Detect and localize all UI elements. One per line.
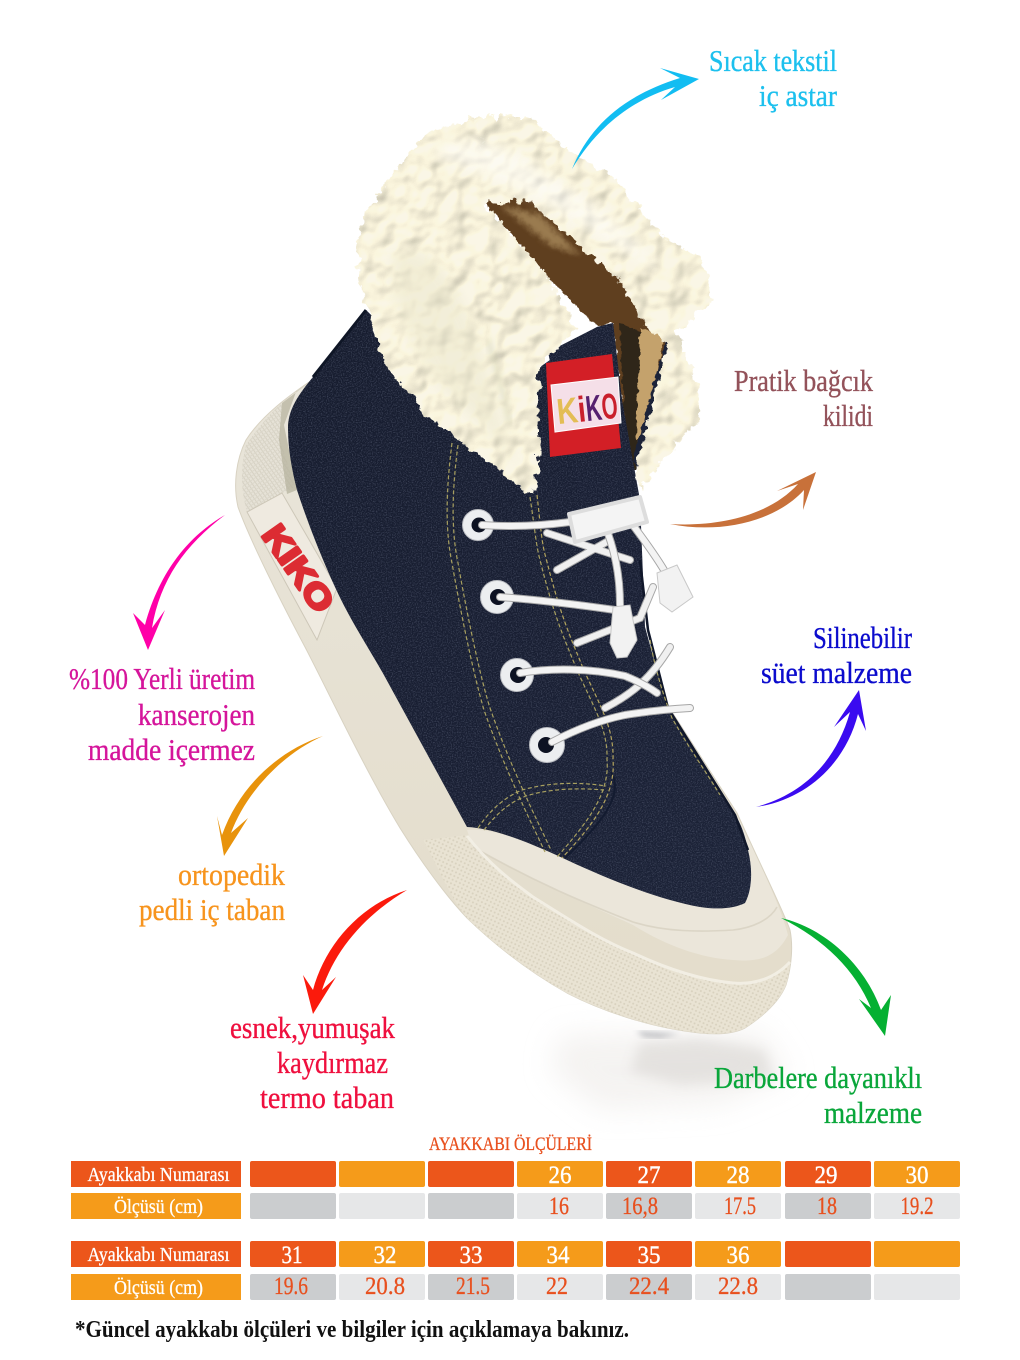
table row: measurements 31-36: 22.8 — [718, 1273, 758, 1300]
cord lock — [569, 497, 647, 542]
callout: Pratik bağcık kilidi — [734, 364, 874, 433]
callout: Darbelere dayanıklı malzeme — [714, 1061, 922, 1130]
navy suede upper — [288, 310, 751, 908]
callout: Silinebilir süet malzeme — [761, 621, 912, 690]
table row: shoe numbers 31-36 — [71, 1241, 960, 1269]
fur collar back — [440, 117, 713, 490]
callout: %100 Yerli üretim — [69, 662, 255, 767]
tag: KIKO woven label: K — [584, 387, 604, 429]
brand plate: KIKO: KIKO — [255, 518, 342, 619]
outsole — [236, 380, 792, 1034]
eyelets — [462, 510, 564, 762]
table row: shoe numbers 31-36: 32 — [374, 1242, 396, 1269]
tongue — [548, 323, 628, 510]
stitching — [447, 443, 720, 858]
inner lining — [482, 196, 676, 470]
callout: esnek yumuşak kaydırmaz termo taban: esnek,yumuşak — [230, 1011, 396, 1045]
callout: esnek yumuşak kaydırmaz termo taban: kaydırmaz — [277, 1046, 388, 1080]
table row: measurements 26-30: 16 — [549, 1193, 569, 1220]
table row: shoe numbers 26-30 — [71, 1161, 960, 1189]
callout: ortopedik pedli iç taban: ortopedik — [178, 858, 286, 892]
tag: KIKO woven label: i — [576, 388, 588, 430]
size table heading: AYAKKABI ÖLÇÜLERİ — [429, 1134, 592, 1155]
table row: measurements 31-36: 21.5 — [456, 1273, 490, 1300]
callout: Pratik bağcık kilidi: kilidi — [823, 399, 873, 433]
table row: measurements 31-36: 22.4 — [629, 1273, 669, 1300]
brand plate: KIKO — [247, 493, 342, 640]
table row: measurements 31-36: 20.8 — [365, 1273, 405, 1300]
arrow: magenta — [133, 515, 225, 650]
tag: KIKO woven label: O — [599, 385, 620, 427]
arrow: red — [303, 890, 407, 1014]
fur collar front flap — [357, 120, 660, 493]
table row: measurements 26-30: 16,8 — [622, 1193, 658, 1220]
table row: shoe numbers 31-36: 35 — [638, 1242, 660, 1269]
table row: measurements 26-30: 19.2 — [900, 1193, 934, 1220]
callout: Sıcak tekstil iç astar: iç astar — [759, 79, 837, 113]
table row: shoe numbers 31-36: 31 — [282, 1242, 302, 1269]
laces over — [482, 517, 690, 742]
table row: shoe numbers 31-36: 33 — [460, 1242, 482, 1269]
callout: Silinebilir süet malzeme: Silinebilir — [813, 621, 912, 655]
arrow: orange — [217, 736, 323, 856]
table row: shoe numbers 26-30: 26 — [548, 1162, 572, 1189]
tag: KIKO woven label: K — [555, 389, 580, 432]
callout: esnek yumuşak kaydırmaz termo taban: termo taban — [260, 1081, 394, 1115]
table row: shoe numbers 26-30: 27 — [638, 1162, 660, 1189]
table row: measurements 26-30: Ölçüsü (cm) — [114, 1195, 203, 1218]
callout: Darbelere dayanıklı malzeme: Darbelere dayanıklı — [714, 1061, 922, 1095]
arrow: brown — [670, 472, 816, 527]
table row: measurements 31-36: Ölçüsü (cm) — [114, 1276, 203, 1299]
table row: measurements 26-30: 18 — [817, 1193, 837, 1220]
table row: shoe numbers 26-30: 30 — [906, 1162, 928, 1189]
table row: shoe numbers 31-36: 36 — [726, 1242, 750, 1269]
callout: ortopedik pedli iç taban: pedli iç taban — [139, 893, 285, 927]
table row: shoe numbers 26-30: 29 — [814, 1162, 838, 1189]
table row: shoe numbers 31-36: 34 — [546, 1242, 570, 1269]
arrow: blue — [756, 690, 866, 807]
callout: Darbelere dayanıklı malzeme: malzeme — [824, 1096, 922, 1130]
callout: Pratik bağcık kilidi: Pratik bağcık — [734, 364, 874, 398]
laces under — [547, 533, 670, 708]
arrow: cyan — [572, 68, 699, 169]
shoe reflection shadow — [550, 1030, 790, 1110]
shoe illustration — [236, 117, 792, 1034]
table row: measurements 31-36: 22 — [546, 1273, 568, 1300]
table row: measurements 26-30: 17.5 — [724, 1193, 756, 1220]
callout: %100 Yerli üretim: %100 Yerli üretim — [69, 662, 255, 696]
eyelets and laces — [462, 497, 693, 762]
callout: Silinebilir süet malzeme: süet malzeme — [761, 656, 912, 690]
arrow: green — [781, 918, 891, 1036]
callout: esnek yumuşak kaydırmaz termo taban — [230, 1011, 396, 1115]
callout: Sıcak tekstil iç astar — [709, 44, 837, 113]
table row: measurements 26-30 — [71, 1193, 960, 1220]
table row: measurements 31-36: 19.6 — [274, 1273, 308, 1300]
callout: %100 Yerli üretim: madde içermez — [88, 733, 255, 767]
footnote: *Güncel ayakkabı ölçüleri ve bilgiler için açıklamaya bakınız. — [75, 1317, 629, 1343]
table row: measurements 31-36 — [71, 1273, 960, 1300]
callout: Sıcak tekstil iç astar: Sıcak tekstil — [709, 44, 837, 78]
table row: shoe numbers 26-30: Ayakkabı Numarası — [88, 1164, 230, 1186]
tag: KIKO woven label — [546, 354, 621, 457]
table row: shoe numbers 26-30: 28 — [726, 1162, 750, 1189]
table row: shoe numbers 31-36: Ayakkabı Numarası — [88, 1244, 230, 1266]
callout: ortopedik pedli iç taban — [139, 858, 286, 927]
callout: %100 Yerli üretim: kanserojen — [138, 698, 255, 732]
size table — [71, 1161, 960, 1300]
lace tips — [610, 605, 637, 658]
